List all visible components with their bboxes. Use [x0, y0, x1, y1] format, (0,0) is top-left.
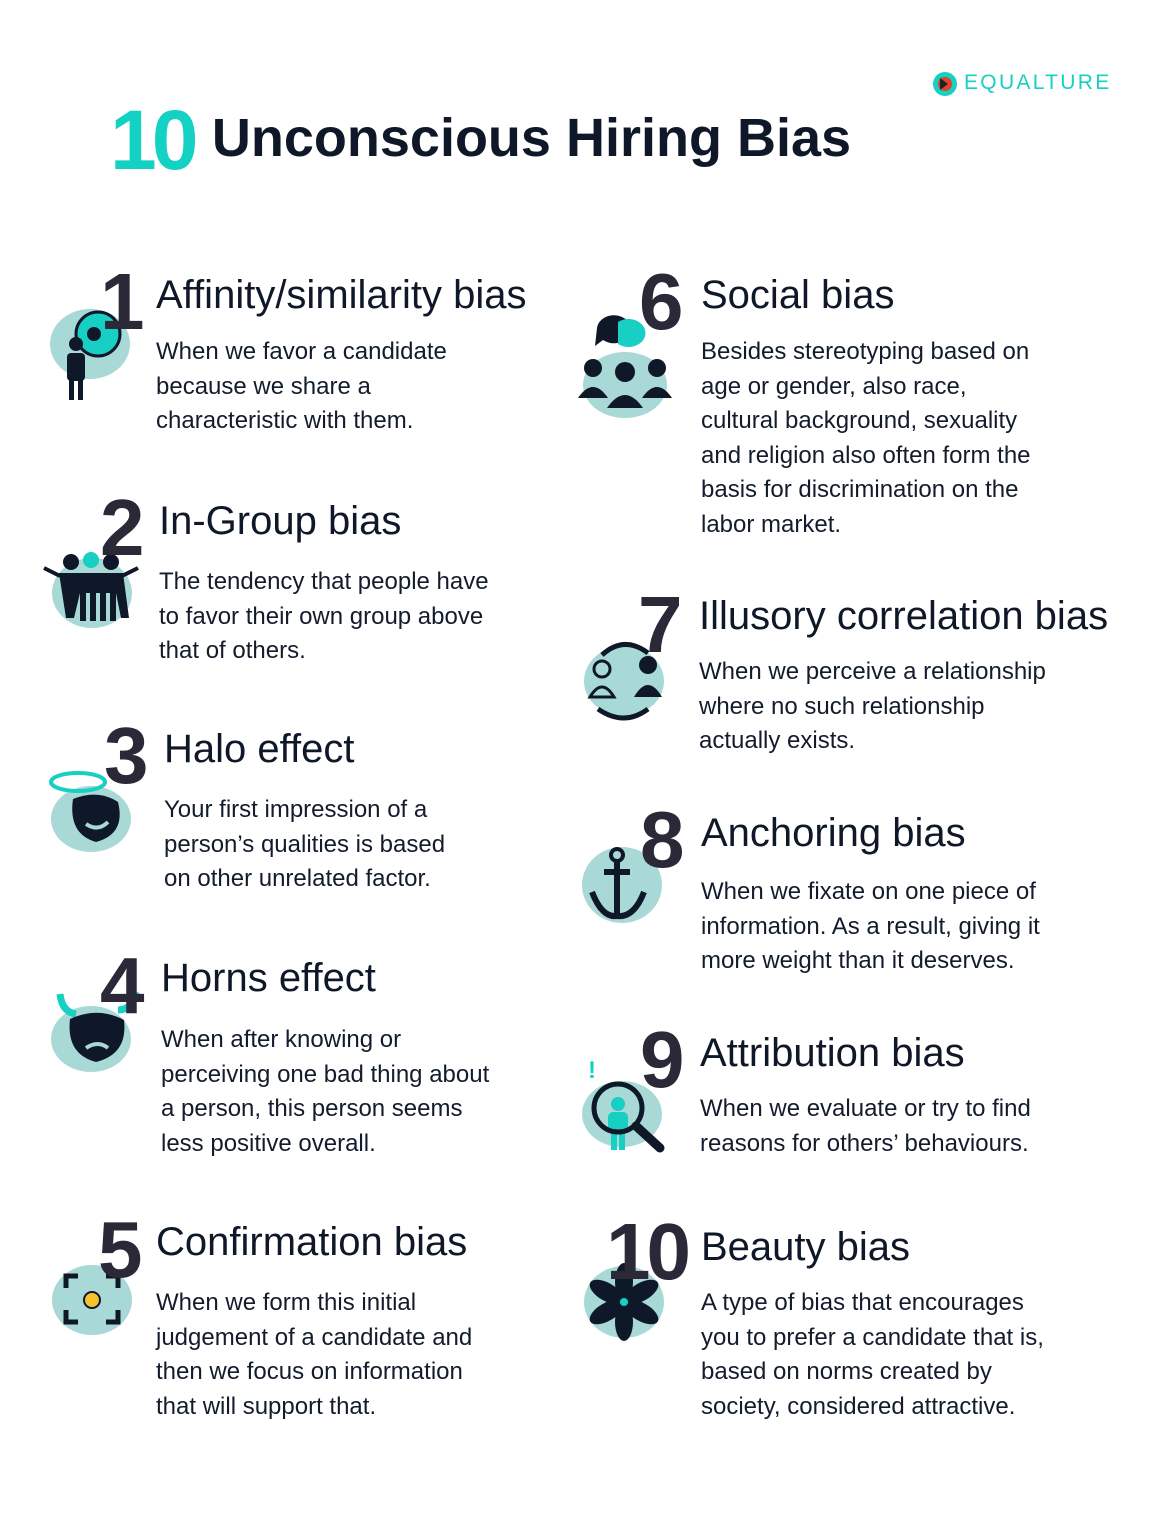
text	[700, 1095, 1031, 1157]
text: that will support that.	[156, 1393, 376, 1420]
text	[156, 338, 447, 434]
heading: Illusory correlation bias	[699, 594, 1108, 638]
number 1: 1	[100, 257, 140, 346]
heading: Halo effect	[164, 727, 354, 771]
text: judgement of a candidate and	[156, 1324, 472, 1351]
text: because we share a	[156, 373, 371, 400]
text: that of others.	[159, 637, 306, 664]
number 4: 4	[100, 941, 140, 1030]
text	[155, 1289, 472, 1420]
text: A type of bias that encourages	[701, 1289, 1024, 1316]
text: The tendency that people have	[159, 568, 489, 595]
number 7: 7	[638, 580, 678, 669]
text: When we perceive a relationship	[699, 658, 1046, 685]
number 3: 3	[104, 711, 144, 800]
icon: person mirror	[50, 309, 130, 400]
icon: two people cycle	[584, 642, 664, 720]
number 6: 6	[639, 257, 680, 346]
heading: Anchoring bias	[701, 811, 966, 855]
item 10	[584, 1207, 1044, 1420]
text: you to prefer a candidate that is,	[701, 1324, 1044, 1351]
icon: magnifier person	[582, 1057, 664, 1152]
heading: Horns effect	[161, 956, 376, 1000]
text: to favor their own group above	[159, 603, 483, 630]
text	[701, 338, 1031, 538]
logo: EQUALTURE	[964, 71, 1112, 94]
text: age or gender, also race,	[701, 373, 967, 400]
text	[701, 1289, 1044, 1420]
item 2	[43, 483, 489, 664]
icon: anchor	[582, 847, 662, 923]
text: When we favor a candidate	[156, 338, 447, 365]
item 1	[50, 257, 526, 434]
text: actually exists.	[699, 727, 855, 754]
text: When we fixate on one piece of	[701, 878, 1036, 905]
text: labor market.	[701, 511, 841, 538]
text: Besides stereotyping based on	[701, 338, 1029, 365]
item 6	[578, 257, 1031, 538]
icon: halo mask	[49, 771, 131, 852]
text: information. As a result, giving it	[701, 913, 1040, 940]
text: When after knowing or	[161, 1026, 401, 1053]
number 10: 10	[606, 1207, 687, 1296]
item 8	[582, 795, 1040, 974]
text: Your first impression of a	[164, 796, 427, 823]
text: society, considered attractive.	[701, 1393, 1015, 1420]
text: basis for discrimination on the	[701, 476, 1018, 503]
heading: Attribution bias	[700, 1031, 965, 1075]
icon: flower	[584, 1263, 664, 1341]
text: then we focus on information	[156, 1358, 463, 1385]
text: on other unrelated factor.	[164, 865, 431, 892]
icon: focus frame	[52, 1265, 132, 1335]
icon: horns mask	[51, 992, 140, 1072]
heading: In-Group bias	[159, 499, 401, 543]
text	[164, 796, 445, 892]
number 2: 2	[100, 483, 140, 572]
text: perceiving one bad thing about	[161, 1061, 489, 1088]
item 4	[51, 941, 490, 1157]
item 7	[584, 580, 1108, 754]
text	[701, 878, 1040, 974]
text	[699, 658, 1046, 754]
heading: Beauty bias	[701, 1225, 910, 1269]
item 9	[582, 1015, 1031, 1157]
text: characteristic with them.	[156, 407, 413, 434]
text: cultural background, sexuality	[701, 407, 1017, 434]
heading: Affinity/similarity bias	[156, 273, 526, 317]
text: a person, this person seems	[161, 1095, 462, 1122]
icon: group	[43, 552, 139, 628]
number 9: 9	[640, 1015, 680, 1104]
text: and religion also often form the	[701, 442, 1031, 469]
number 8: 8	[640, 795, 680, 884]
item 5	[52, 1205, 472, 1420]
text: where no such relationship	[699, 693, 985, 720]
heading: Social bias	[701, 273, 894, 317]
text: less positive overall.	[161, 1130, 376, 1157]
text	[159, 568, 489, 664]
item 3	[49, 711, 445, 892]
text	[161, 1026, 490, 1157]
heading: Confirmation bias	[156, 1220, 467, 1264]
icon: speech group	[578, 315, 672, 418]
text: When we evaluate or try to find	[700, 1095, 1031, 1122]
text: When we form this initial	[156, 1289, 416, 1316]
icon: magnifier person: !	[588, 1057, 596, 1084]
text: more weight than it deserves.	[701, 947, 1014, 974]
text: reasons for others’ behaviours.	[700, 1130, 1029, 1157]
title: 10 Unconscious Hiring Bias	[110, 93, 851, 187]
text: based on norms created by	[701, 1358, 992, 1385]
text: person’s qualities is based	[164, 831, 445, 858]
number 5: 5	[98, 1205, 138, 1294]
